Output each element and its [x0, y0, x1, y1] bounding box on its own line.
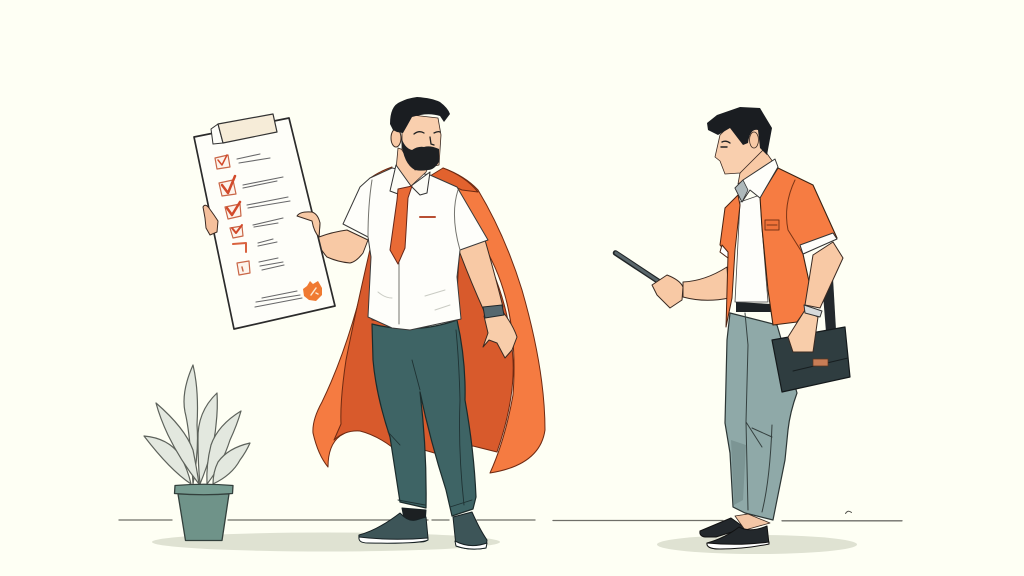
- checklist lines: [237, 154, 302, 307]
- arm: [805, 242, 843, 308]
- front shoe: [707, 526, 769, 549]
- clipboard sheet: [194, 118, 335, 329]
- briefcase: [772, 327, 850, 392]
- necktie: [390, 186, 412, 264]
- eyes and nose: [414, 132, 440, 145]
- right shoe: [453, 512, 487, 549]
- sleeve seam and pocket: [765, 180, 803, 254]
- face: [715, 125, 763, 174]
- ear: [391, 129, 401, 147]
- cape: [313, 167, 545, 473]
- head: [390, 97, 450, 171]
- forearm: [683, 267, 729, 300]
- hair: [707, 107, 772, 155]
- figure: man with bag and pen: [616, 107, 850, 549]
- ground line and floor shadows: [119, 511, 902, 554]
- left arm holding clipboard: [297, 212, 368, 263]
- plant leaves: [144, 365, 250, 484]
- beard: [401, 136, 439, 171]
- trousers: [372, 320, 476, 516]
- bag strap: [822, 278, 836, 332]
- hand on bag: [788, 310, 818, 352]
- checkboxes: [215, 155, 250, 275]
- left shoe: [359, 508, 428, 543]
- orange jacket: [760, 168, 837, 325]
- left jacket panel: [720, 195, 740, 327]
- neck: [738, 148, 773, 184]
- icon: flame badge: [303, 281, 322, 301]
- right arm: [458, 240, 503, 311]
- plant pot: [174, 484, 233, 540]
- clipboard with checklist: [194, 114, 335, 329]
- check marks: [218, 155, 246, 252]
- hand with pen: [652, 275, 683, 308]
- eye: [721, 141, 730, 147]
- back shoe: [700, 518, 745, 537]
- icon: potted plant: [144, 365, 250, 540]
- white shirt: [735, 195, 768, 302]
- belt: [736, 302, 771, 312]
- shirt: [343, 168, 488, 330]
- right hand: [483, 312, 517, 358]
- collar: [390, 165, 430, 195]
- wristwatch: [804, 305, 822, 317]
- ear: [750, 132, 758, 148]
- sleeve cuff: [800, 233, 837, 254]
- neck: [396, 148, 432, 186]
- hand gripping clipboard: [203, 205, 218, 235]
- face: [402, 115, 441, 170]
- figure: man with cape: [297, 97, 545, 549]
- pen: [616, 253, 664, 285]
- hair: [390, 97, 450, 133]
- clip: [211, 124, 223, 144]
- wristwatch: [483, 305, 504, 318]
- shaded collar: [735, 180, 748, 202]
- exposed foot: [735, 514, 770, 530]
- hand on clipboard edge: [297, 212, 320, 237]
- collar: [735, 159, 778, 202]
- trousers: [725, 313, 797, 520]
